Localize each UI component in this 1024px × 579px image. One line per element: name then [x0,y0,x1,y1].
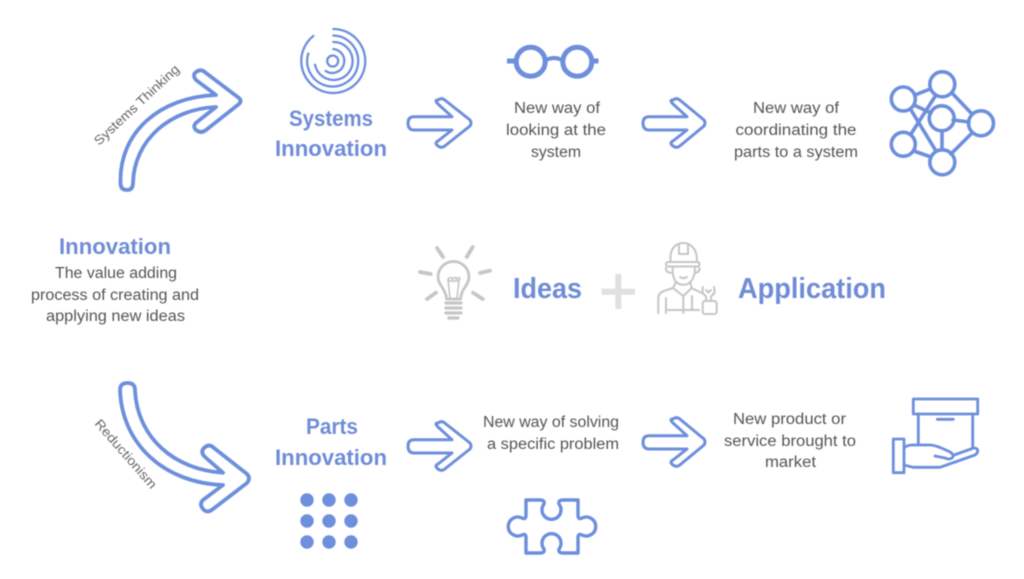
heading: systems innovation [275,106,387,161]
text: innovation definition: process of creating and [31,287,199,304]
text: new way of coordinating: coordinating the [736,122,856,139]
text: new way of solving: a specific problem [487,436,619,453]
arrow: systems innovation to looking [408,99,471,147]
icon: plus [602,274,635,309]
icon: light bulb [420,247,490,318]
text: new way of looking: looking at the [506,122,606,139]
text: new way of looking: New way of [514,100,601,117]
text: innovation definition: The value adding [55,265,177,282]
text: innovation definition [31,265,199,325]
icon: network [891,72,994,175]
heading: systems innovation: Systems [289,106,373,131]
heading: systems innovation: Innovation [275,136,387,161]
text: new product or service: market [765,454,817,471]
icon: nine dots [300,493,358,549]
text: new way of coordinating: New way of [753,100,840,117]
icon: puzzle piece [508,500,596,553]
text: new way of coordinating: parts to a system [734,144,858,161]
label: reductionism: Reductionism [92,416,160,492]
text: new way of looking: system [531,144,581,161]
text: new product or service: New product or [733,411,846,428]
heading: innovation: Innovation [59,234,171,259]
icon: glasses [507,47,598,76]
heading: parts innovation: Innovation [275,445,387,470]
arrow: systems thinking curve [120,70,240,190]
label: application: Application [738,273,886,305]
icon: engineer with wrench [658,243,717,314]
text: new way of looking [506,100,606,161]
arrow: parts innovation to solving [408,422,471,470]
arrow: looking to coordinating [643,99,705,147]
text: new way of solving: New way of solving [483,414,619,431]
heading: parts innovation [275,414,387,470]
text: new product or service: service brought to [724,433,856,450]
heading: parts innovation: Parts [306,414,358,439]
text: new way of coordinating [734,100,858,161]
text: new product or service [724,411,856,471]
arrow: reductionism curve [120,383,249,512]
icon: box on hand [893,399,978,473]
arrow: solving to product [643,418,705,466]
text: new way of solving [483,414,619,453]
icon: concentric spiral [301,29,365,93]
label: systems thinking: Systems Thinking [91,62,182,148]
label: ideas: Ideas [513,273,582,305]
text: innovation definition: applying new ideas [46,308,185,325]
